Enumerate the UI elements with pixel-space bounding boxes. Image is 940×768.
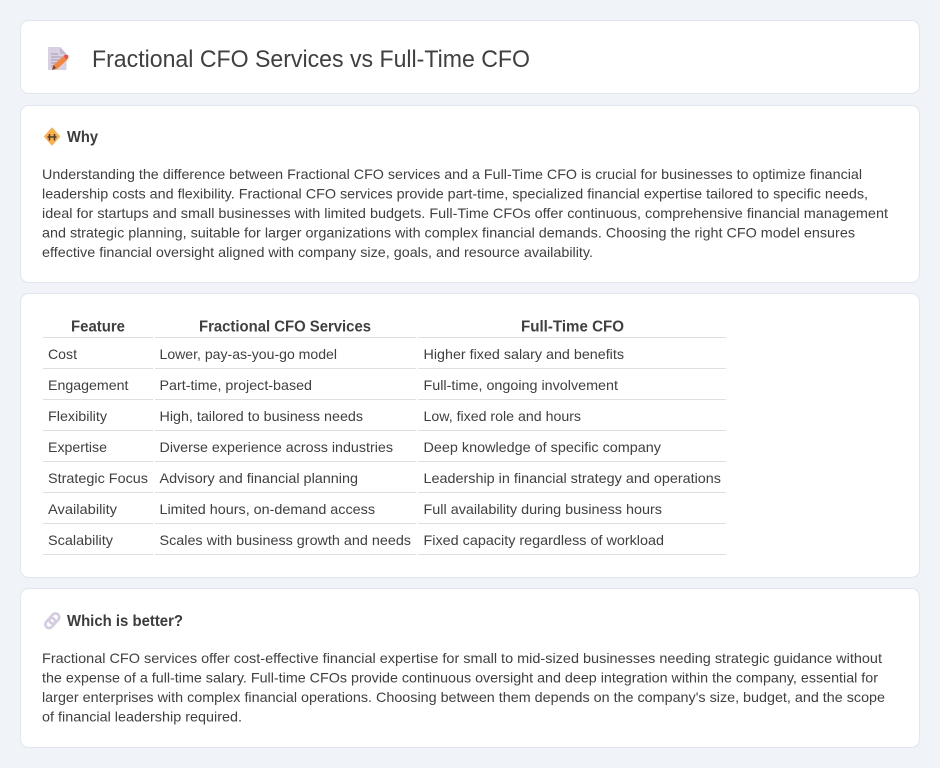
row: strategic focus: Advisory and financial planning <box>160 470 358 486</box>
panel: why <box>20 106 920 282</box>
table header row <box>71 318 624 336</box>
text block: which is better paragraph: of financial leadership required. <box>42 708 242 724</box>
text block: why paragraph: and strategic planning, suitable for larger organizations with complex financial demands. Choosing the right CFO model ensures <box>42 224 855 240</box>
row: engagement <box>48 377 618 393</box>
row: scalability: Scales with business growth and needs <box>160 532 411 548</box>
row: engagement: Full-time, ongoing involvement <box>424 377 618 393</box>
text block: why paragraph: Understanding the difference between Fractional CFO services and a Full-Time CFO is crucial for businesses to optimize financial <box>42 166 862 182</box>
row: availability: Full availability during business hours <box>424 501 662 517</box>
row: cost: Cost <box>48 346 77 362</box>
row: expertise <box>48 439 661 455</box>
row: engagement: Engagement <box>48 377 129 393</box>
row: flexibility: Low, fixed role and hours <box>424 408 581 424</box>
icon: chain link <box>44 612 61 630</box>
row: strategic focus: Strategic Focus <box>48 470 148 486</box>
row: flexibility <box>48 408 581 424</box>
text block: why paragraph: effective financial oversight aligned with company size, goals, and resource availability. <box>42 244 593 260</box>
panel: comparison table <box>20 294 920 578</box>
text block: why paragraph: ideal for startups and small businesses with limited budgets. Full-Time CFOs offer continuous, comprehensive financial management <box>42 205 888 221</box>
text block: which is better paragraph: larger enterprises with complex financial operations. Choosing between them depends on the company's size, budget, and the scope <box>42 689 885 705</box>
row: strategic focus: Leadership in financial strategy and operations <box>424 470 721 486</box>
text block: why paragraph <box>42 166 888 260</box>
row: cost <box>48 346 624 362</box>
icon: warning diamond <box>44 128 60 145</box>
table header row: Full-Time CFO <box>521 318 624 336</box>
row: cost: Higher fixed salary and benefits <box>424 346 624 362</box>
row: availability: Availability <box>48 501 117 517</box>
heading: why: Why <box>67 129 98 146</box>
text block: which is better paragraph: the expense of a full-time salary. Full-time CFOs provide continuous oversight and deep integration within the company, essential for <box>42 670 878 686</box>
heading: which is better: Which is better? <box>67 613 183 630</box>
row: cost: Lower, pay-as-you-go model <box>160 346 337 362</box>
icon: document with pencil <box>48 47 68 70</box>
row: scalability: Fixed capacity regardless of workload <box>424 532 664 548</box>
text block: which is better paragraph <box>42 650 885 724</box>
row: expertise: Expertise <box>48 439 107 455</box>
row: availability <box>48 501 662 517</box>
text block: which is better paragraph: Fractional CFO services offer cost-effective financial expertise for small to mid-sized businesses needing strategic guidance without <box>42 650 882 666</box>
row: flexibility: High, tailored to business needs <box>160 408 363 424</box>
text block: why paragraph: leadership costs and flexibility. Fractional CFO services provide part-time, specialized financial expertise tailored to specific needs, <box>42 186 868 202</box>
title: Fractional CFO Services vs Full-Time CFO <box>92 46 530 73</box>
row: expertise: Diverse experience across industries <box>160 439 393 455</box>
row: engagement: Part-time, project-based <box>160 377 312 393</box>
table header row: Feature <box>71 318 125 336</box>
panel: which is better <box>20 588 920 748</box>
row: expertise: Deep knowledge of specific company <box>424 439 661 455</box>
row: strategic focus <box>48 470 721 486</box>
row: flexibility: Flexibility <box>48 408 107 424</box>
panel: title header <box>20 20 920 94</box>
row: scalability <box>48 532 664 548</box>
row: availability: Limited hours, on-demand access <box>160 501 375 517</box>
row: scalability: Scalability <box>48 532 113 548</box>
table header row: Fractional CFO Services <box>199 318 371 336</box>
